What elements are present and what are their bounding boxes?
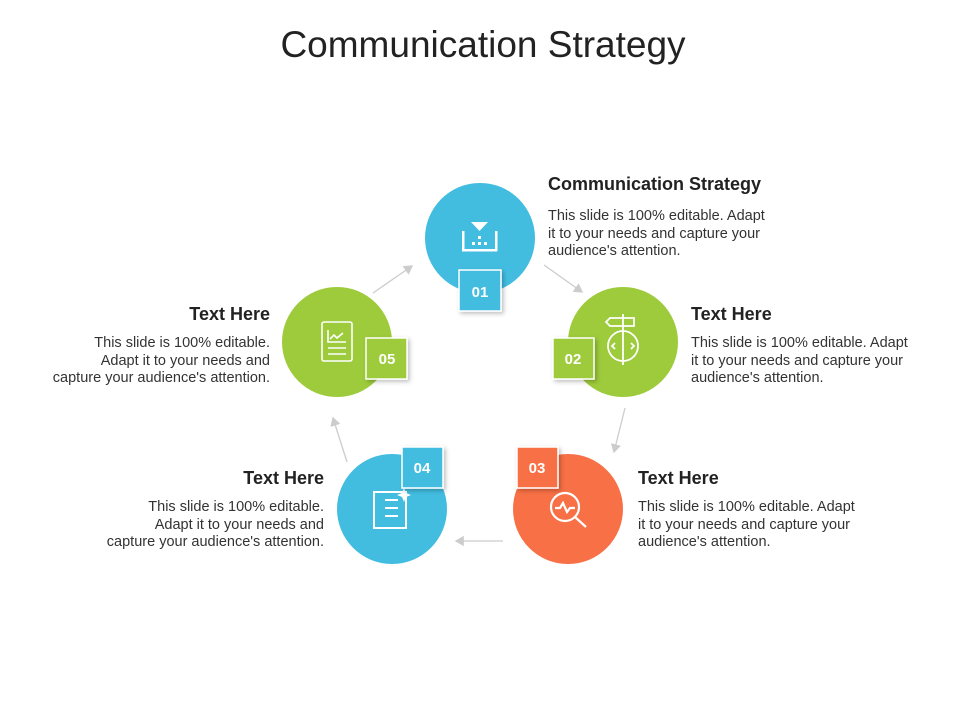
text: it to your needs and capture your [548, 226, 760, 242]
text: it to your needs and capture your [638, 516, 850, 532]
text: audience's attention. [638, 534, 771, 550]
text: Text Here [189, 304, 270, 324]
text: audience's attention. [548, 243, 681, 259]
text: Communication Strategy [548, 174, 761, 194]
step 02 [553, 287, 678, 397]
text 04 [107, 468, 324, 550]
text: Text Here [243, 468, 324, 488]
step 04 [337, 447, 447, 564]
step 05 [282, 287, 407, 397]
text: This slide is 100% editable. [148, 499, 324, 515]
step 02: 02 [565, 351, 581, 368]
text: This slide is 100% editable. [94, 335, 270, 351]
step 01 [425, 183, 535, 311]
text: Text Here [638, 468, 719, 488]
step 03 [513, 447, 623, 564]
title: Communication Strategy [280, 24, 686, 65]
text: Adapt it to your needs and [155, 516, 324, 532]
text: This slide is 100% editable. Adapt [638, 499, 855, 515]
text: capture your audience's attention. [107, 534, 324, 550]
text: Adapt it to your needs and [101, 352, 270, 368]
text: This slide is 100% editable. Adapt [548, 208, 765, 224]
step 01: 01 [472, 284, 488, 301]
text 05 [53, 304, 270, 386]
step 03: 03 [529, 460, 545, 477]
text 03 [638, 468, 855, 550]
arrows [333, 265, 625, 541]
text: This slide is 100% editable. Adapt [691, 335, 908, 351]
step 04: 04 [414, 460, 431, 477]
text: Text Here [691, 304, 772, 324]
text: it to your needs and capture your [691, 352, 903, 368]
text: capture your audience's attention. [53, 370, 270, 386]
text 01 [548, 174, 765, 259]
text: audience's attention. [691, 370, 824, 386]
step 05: 05 [379, 351, 395, 368]
text 02 [691, 304, 908, 386]
